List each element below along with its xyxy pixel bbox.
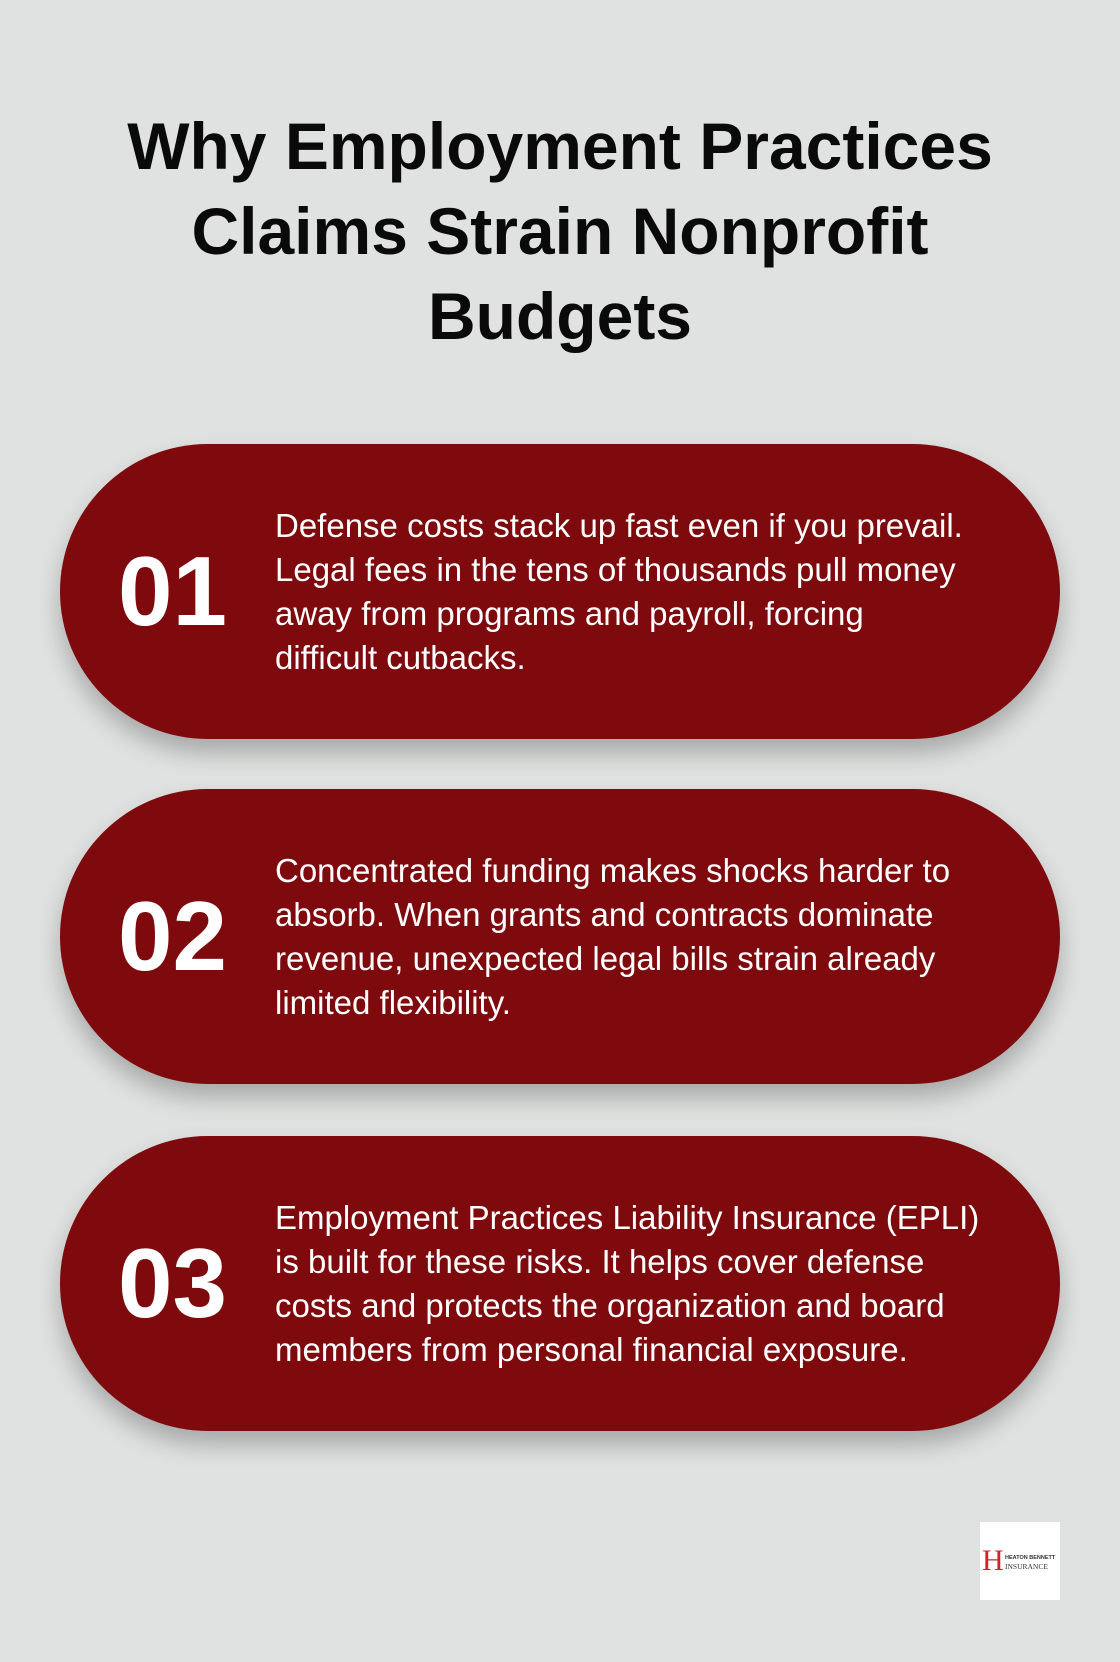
text 02: absorb. When grants and contracts dominate	[275, 896, 934, 932]
text 02	[275, 852, 950, 1021]
number 03: 03	[118, 1228, 227, 1338]
number 01: 01	[118, 536, 227, 646]
card 01	[60, 444, 1060, 739]
text 02: limited flexibility.	[275, 984, 511, 1020]
text 03: is built for these risks. It helps cover defense	[275, 1242, 924, 1280]
text 03	[275, 1198, 979, 1368]
title: Claims Strain Nonprofit	[191, 194, 929, 268]
logo: HEATON BENNETT	[1005, 1555, 1056, 1561]
title: Why Employment Practices	[127, 109, 993, 183]
text 03: members from personal financial exposure.	[275, 1330, 908, 1368]
card 03	[60, 1136, 1060, 1431]
text 01: Legal fees in the tens of thousands pull money	[275, 550, 956, 588]
number 02: 02	[118, 881, 227, 991]
text 03: costs and protects the organization and board	[275, 1286, 945, 1324]
logo: INSURANCE	[1005, 1562, 1048, 1571]
text 02: revenue, unexpected legal bills strain already	[275, 940, 935, 976]
text 01: away from programs and payroll, forcing	[275, 594, 864, 632]
text 01: difficult cutbacks.	[275, 638, 526, 676]
title: Budgets	[428, 279, 692, 353]
text 02: Concentrated funding makes shocks harder to	[275, 852, 950, 888]
text 01: Defense costs stack up fast even if you prevail.	[275, 506, 963, 544]
text 01	[275, 506, 963, 676]
card 02	[60, 789, 1060, 1084]
logo	[980, 1522, 1060, 1600]
logo: H	[982, 1544, 1004, 1577]
title	[127, 109, 993, 353]
text 03: Employment Practices Liability Insurance (EPLI)	[275, 1198, 979, 1236]
